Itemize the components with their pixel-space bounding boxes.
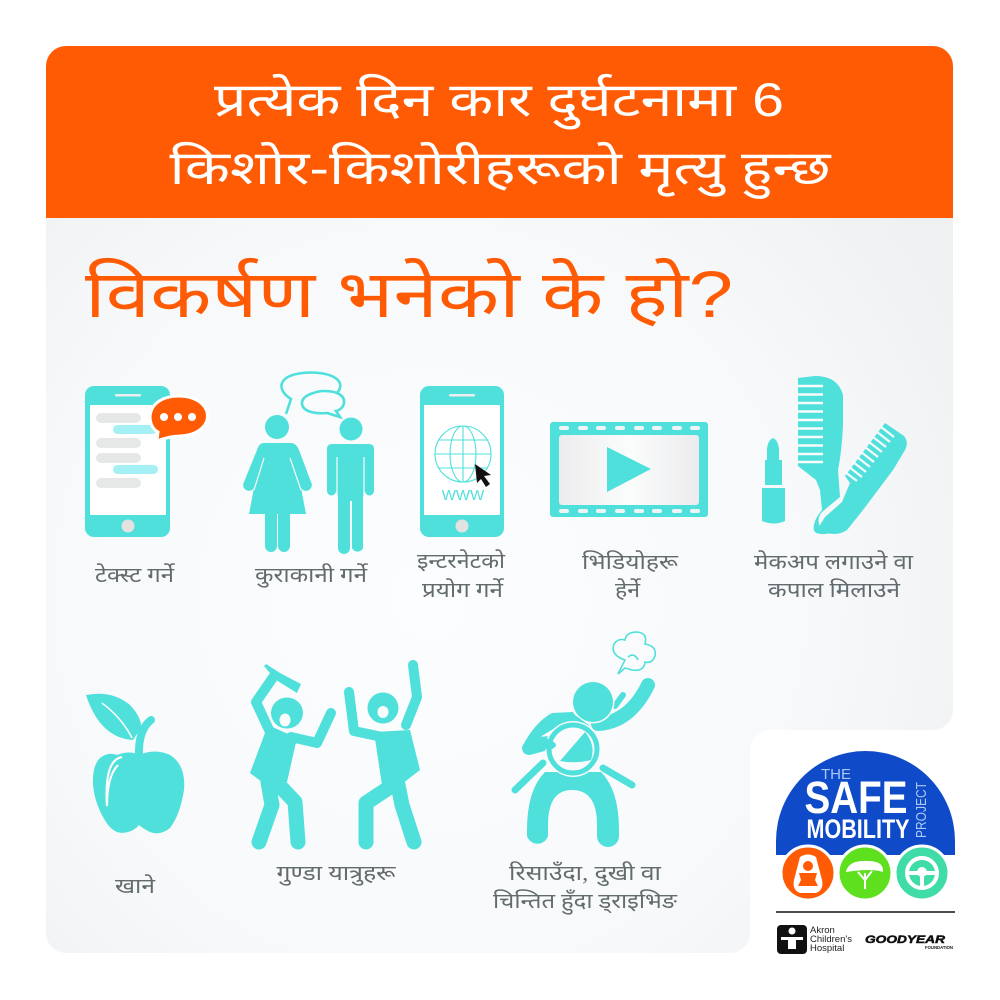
icon: phone texting [85, 386, 208, 537]
globe [435, 426, 491, 482]
logo: safe mobility project: SAFE [804, 772, 908, 823]
logo: safe mobility project: THE [821, 766, 851, 783]
icon: rowdy passengers [250, 664, 420, 842]
icon: lipstick and combs [762, 376, 907, 534]
speech bubbles [281, 372, 344, 417]
steam cloud [613, 632, 655, 674]
title [170, 73, 832, 199]
lipstick [765, 438, 782, 485]
comb large [798, 376, 843, 534]
woman [243, 415, 312, 552]
heading: विकर्षण भनेको के हो? [85, 257, 733, 331]
label: emotional driving [493, 861, 678, 915]
logo: akron children's hospital [777, 925, 852, 954]
icon: video film strip [550, 422, 708, 517]
panel: orange header [46, 46, 953, 218]
icon: steering wheel [895, 846, 949, 900]
label: videos: भिडियोहरू [582, 550, 679, 574]
raised arm [598, 685, 648, 724]
man [327, 418, 374, 554]
label: emotional driving: चिन्तित हुँदा ड्राइभिङ [493, 889, 678, 915]
icon: angry driver [515, 632, 655, 847]
label: internet: इन्टरनेटको [417, 549, 506, 573]
cursor [475, 464, 491, 487]
label: makeup [754, 550, 914, 602]
steering wheel [545, 721, 601, 777]
label: internet [417, 549, 506, 602]
logo: akron children's hospital: Hospital [810, 943, 844, 954]
title: किशोर-किशोरीहरूको मृत्यु हुन्छ [170, 141, 832, 199]
label: makeup: मेकअप लगाउने वा [754, 550, 914, 574]
label: talking: कुराकानी गर्ने [255, 563, 369, 588]
logo: safe mobility project [776, 751, 955, 954]
logo: akron children's hospital: Akron [810, 925, 835, 936]
passenger right [349, 665, 420, 842]
label: videos: हेर्ने [615, 578, 642, 602]
logo: goodyear foundation: GOODYEAR [865, 934, 945, 946]
icon: phone internet [420, 386, 504, 537]
logo: goodyear foundation [865, 934, 953, 950]
logo: safe mobility project: PROJECT [914, 782, 930, 838]
label: videos [582, 550, 679, 602]
icon: phone internet: WWW [442, 487, 485, 504]
legs [527, 772, 619, 847]
panel: background [46, 218, 953, 953]
label: eating: खाने [115, 874, 155, 898]
label: rowdy passengers: गुण्डा यात्रुहरू [276, 861, 396, 886]
logo: safe mobility project: MOBILITY [806, 814, 910, 844]
head [572, 680, 614, 724]
label: makeup: कपाल मिलाउने [768, 578, 900, 602]
logo: goodyear foundation: FOUNDATION [925, 945, 953, 950]
icon: orange speech bubble [150, 396, 208, 441]
logo: akron children's hospital: Children's [810, 934, 852, 945]
title: प्रत्येक दिन कार दुर्घटनामा 6 [214, 73, 784, 130]
icon: helmet [838, 846, 892, 900]
torso and arm [522, 712, 590, 755]
icon: apple [86, 694, 184, 833]
icon: child seat [781, 846, 835, 900]
passenger left [250, 664, 331, 842]
label: emotional driving: रिसाउँदा, दुखी वा [509, 861, 662, 887]
label: internet: प्रयोग गर्ने [422, 578, 505, 602]
icon: two people talking [243, 372, 374, 554]
label: texting: टेक्स्ट गर्ने [95, 563, 176, 587]
comb small [819, 423, 907, 534]
